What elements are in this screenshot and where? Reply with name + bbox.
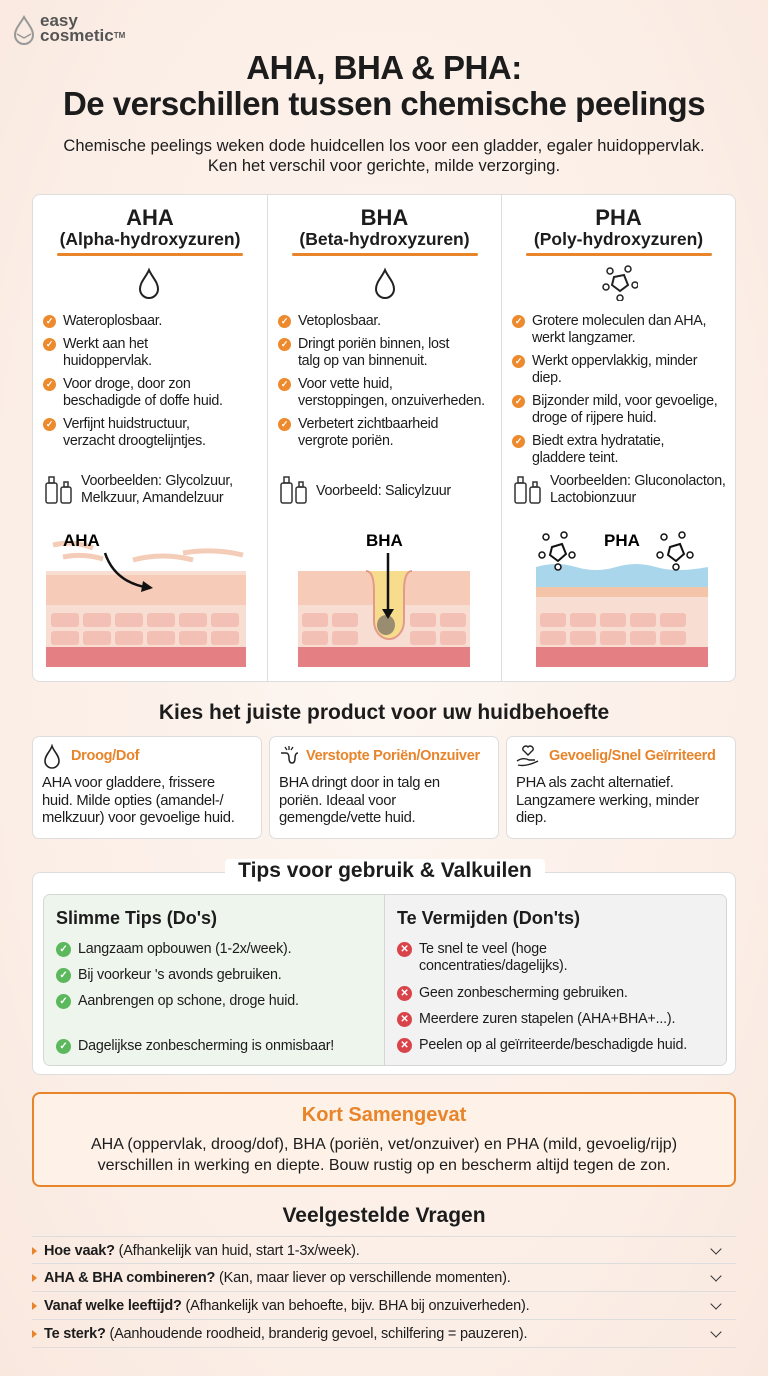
do's: Aanbrengen op schone, droge huid. xyxy=(78,993,299,1009)
bullets PHA: gladdere teint. xyxy=(532,450,618,466)
card: droog: Droog/Dof xyxy=(71,748,139,764)
bullets AHA: huidoppervlak. xyxy=(63,353,152,369)
faq items: Te sterk? (Aanhoudende roodheid, branderig gevoel, schilfering = pauzeren). xyxy=(44,1326,527,1342)
logo xyxy=(14,11,125,45)
bullets PHA: Werkt oppervlakkig, minder xyxy=(532,353,697,369)
bullets AHA: verzacht droogtelijntjes. xyxy=(63,433,206,449)
logo: cosmeticTM xyxy=(40,26,125,45)
card: droog: melkzuur) voor gevoelige huid. xyxy=(42,810,235,826)
do's: Slimme Tips (Do's) xyxy=(56,908,217,928)
examples AHA xyxy=(45,473,233,506)
panel: comparison xyxy=(32,194,736,682)
bullets AHA: Wateroplosbaar. xyxy=(63,313,162,329)
card: gevoelig: Langzamere werking, minder xyxy=(516,792,699,808)
title: De verschillen tussen chemische peelings xyxy=(63,85,705,122)
card: gevoelig: diep. xyxy=(516,810,547,826)
don'ts: Peelen op al geïrriteerde/beschadigde huid. xyxy=(419,1037,687,1053)
examples PHA: Voorbeelden: Gluconolacton, xyxy=(550,473,726,489)
summary xyxy=(32,1092,736,1187)
do's: Dagelijkse zonbescherming is onmisbaar! xyxy=(78,1038,334,1054)
bullets PHA xyxy=(512,313,717,466)
subtitle: Ken het verschil voor gerichte, milde verzorging. xyxy=(208,157,560,175)
examples BHA: Voorbeeld: Salicylzuur xyxy=(316,483,451,499)
bullets BHA: verstoppingen, onzuiverheden. xyxy=(298,393,485,409)
bullets AHA: Verfijnt huidstructuur, xyxy=(63,416,190,432)
column: PHA: (Poly-hydroxyzuren) xyxy=(534,229,703,249)
do's: Bij voorkeur 's avonds gebruiken. xyxy=(78,967,282,983)
illustration: BHA pore xyxy=(298,531,470,667)
faq items xyxy=(32,1236,736,1348)
bullets BHA: Voor vette huid, xyxy=(298,376,393,392)
column: BHA xyxy=(267,195,501,681)
card: gevoelig: PHA als zacht alternatief. xyxy=(516,775,674,791)
bullets BHA: Verbetert zichtbaarheid xyxy=(298,416,438,432)
illustration: AHA skin: AHA xyxy=(63,531,100,550)
illustration: AHA skin xyxy=(46,531,246,667)
icon: molecule xyxy=(602,265,638,301)
do's xyxy=(44,895,385,1067)
bullets BHA xyxy=(278,313,485,449)
column: AHA: (Alpha-hydroxyzuren) xyxy=(60,229,240,249)
faq items: AHA & BHA combineren? (Kan, maar liever op verschillende momenten). xyxy=(44,1270,511,1286)
don'ts xyxy=(385,895,728,1067)
card: porien: gemengde/vette huid. xyxy=(279,810,415,826)
column: PHA xyxy=(501,195,735,681)
faq items: Vanaf welke leeftijd? (Afhankelijk van behoefte, bijv. BHA bij onzuiverheden). xyxy=(44,1298,529,1314)
heading: tips: Tips voor gebruik & Valkuilen xyxy=(238,859,532,882)
column: BHA: BHA xyxy=(361,205,408,230)
subtitle xyxy=(63,137,705,175)
subtitle: Chemische peelings weken dode huidcellen los voor een gladder, egaler huidoppervlak. xyxy=(63,137,705,155)
summary: verschillen in werking en diepte. Bouw rustig op en bescherm altijd tegen de zon. xyxy=(98,1157,670,1174)
title xyxy=(63,49,705,122)
bullets AHA: Voor droge, door zon xyxy=(63,376,191,392)
column: AHA xyxy=(43,205,246,667)
icon: drop xyxy=(139,268,159,299)
column: PHA: PHA xyxy=(595,205,642,230)
card: porien: Verstopte Poriën/Onzuiver xyxy=(306,748,480,764)
column: AHA: AHA xyxy=(126,205,174,230)
bullets BHA: vergrote poriën. xyxy=(298,433,393,449)
examples BHA xyxy=(280,476,451,504)
don'ts: Geen zonbescherming gebruiken. xyxy=(419,985,628,1001)
examples AHA: Melkzuur, Amandelzuur xyxy=(81,490,223,506)
card: droog xyxy=(32,736,262,839)
bullets PHA: Grotere moleculen dan AHA, xyxy=(532,313,706,329)
card: droog: AHA voor gladdere, frissere xyxy=(42,775,215,791)
bullets BHA: talg op van binnenuit. xyxy=(298,353,427,369)
faq items: Hoe vaak? (Afhankelijk van huid, start 1-3x/week). xyxy=(44,1243,360,1259)
bullets PHA: Bijzonder mild, voor gevoelige, xyxy=(532,393,717,409)
bullets PHA: diep. xyxy=(532,370,562,386)
bullets BHA: Dringt poriën binnen, lost xyxy=(298,336,449,352)
do's: Langzaam opbouwen (1-2x/week). xyxy=(78,941,291,957)
bullets AHA: Werkt aan het xyxy=(63,336,148,352)
icon: drop xyxy=(375,268,395,299)
heading: product: Kies het juiste product voor uw huidbehoefte xyxy=(159,701,609,724)
title: AHA, BHA & PHA: xyxy=(246,49,522,86)
card: porien xyxy=(269,736,499,839)
illustration: BHA pore: BHA xyxy=(366,531,403,550)
card: porien: BHA dringt door in talg en xyxy=(279,775,440,791)
don'ts: Te snel te veel (hoge xyxy=(419,941,547,957)
examples PHA: Lactobionzuur xyxy=(550,490,636,506)
bullets PHA: werkt langzamer. xyxy=(532,330,635,346)
summary: Kort Samengevat xyxy=(302,1104,466,1126)
card: porien: poriën. Ideaal voor xyxy=(279,792,396,808)
panel: tips xyxy=(32,872,736,1075)
don'ts: Te Vermijden (Don'ts) xyxy=(397,908,580,928)
bullets PHA: Biedt extra hydratatie, xyxy=(532,433,664,449)
column: BHA: (Beta-hydroxyzuren) xyxy=(299,229,470,249)
heading: FAQ: Veelgestelde Vragen xyxy=(282,1204,486,1227)
examples PHA xyxy=(514,473,726,506)
logo: easy xyxy=(40,11,78,30)
bullets PHA: droge of rijpere huid. xyxy=(532,410,657,426)
bullets AHA: beschadigde of doffe huid. xyxy=(63,393,223,409)
bullets BHA: Vetoplosbaar. xyxy=(298,313,381,329)
examples AHA: Voorbeelden: Glycolzuur, xyxy=(81,473,233,489)
illustration: PHA skin: PHA xyxy=(604,531,640,550)
card: gevoelig xyxy=(506,736,736,839)
card: droog: huid. Milde opties (amandel-/ xyxy=(42,792,223,808)
bullets AHA xyxy=(43,313,223,449)
don'ts: Meerdere zuren stapelen (AHA+BHA+...). xyxy=(419,1011,675,1027)
card: gevoelig: Gevoelig/Snel Geïrriteerd xyxy=(549,748,716,764)
illustration: PHA skin xyxy=(536,531,708,667)
don'ts: concentraties/dagelijks). xyxy=(419,958,567,974)
summary: AHA (oppervlak, droog/dof), BHA (poriën, vet/onzuiver) en PHA (mild, gevoelig/rijp) xyxy=(91,1136,677,1153)
